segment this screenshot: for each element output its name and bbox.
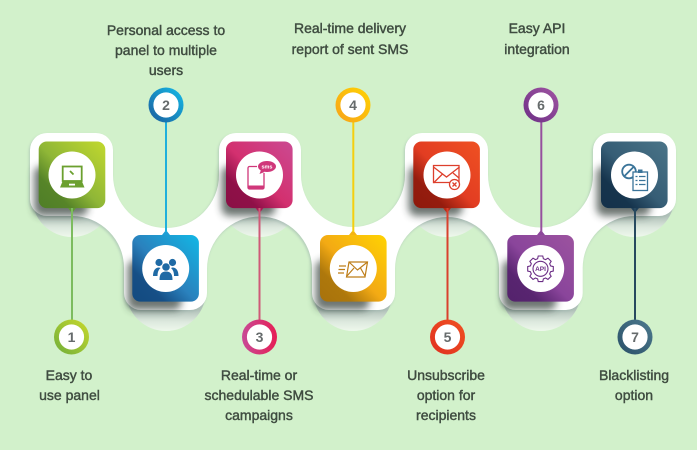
label 4: Real-time delivery (294, 20, 406, 36)
number badge 5 (430, 320, 465, 354)
step 4 (292, 20, 408, 310)
label 2: users (149, 62, 183, 78)
label 6: Easy API (509, 20, 565, 36)
number badge 1 (54, 320, 89, 354)
label 1: use panel (39, 387, 100, 403)
icon: phone with SMS bubble (248, 161, 276, 189)
number badge 7 (618, 320, 652, 354)
icon: fast envelope (338, 262, 368, 277)
number badge 2: 2 (162, 97, 170, 113)
number badge 3 (242, 320, 277, 354)
shadow bowls under tiles (32, 157, 674, 331)
label 1: Easy to (46, 367, 93, 383)
number badge 7: 7 (631, 329, 639, 345)
icon: API gear (528, 256, 553, 282)
step 3 (205, 142, 313, 423)
icon: laptop (60, 166, 84, 188)
number badge 3: 3 (256, 329, 264, 345)
label 2: panel to multiple (115, 42, 217, 58)
icon: blacklist clipboard (622, 165, 648, 190)
label 3: schedulable SMS (205, 387, 313, 403)
step 7 (596, 142, 669, 403)
step 5 (407, 142, 485, 423)
number badge 2 (148, 88, 184, 122)
number badge 4 (336, 88, 370, 122)
step 2 (107, 22, 225, 310)
icon: users (153, 259, 178, 280)
label 5: recipients (416, 407, 476, 423)
icon: phone with SMS bubble: sms (261, 164, 273, 170)
label 7: option (615, 387, 653, 403)
label 7: Blacklisting (599, 367, 669, 383)
number badge 6 (524, 88, 558, 122)
step 1 (34, 142, 105, 403)
label 4: report of sent SMS (292, 41, 408, 57)
label 5: Unsubscribe (407, 367, 485, 383)
number badge 6: 6 (537, 97, 545, 113)
step 6 (502, 20, 574, 310)
number badge 5: 5 (444, 329, 452, 345)
label 3: Real-time or (221, 367, 297, 383)
label 3: campaigns (225, 407, 293, 423)
white wavy band (30, 133, 676, 310)
number badge 1: 1 (68, 329, 76, 345)
label 5: option for (417, 387, 476, 403)
icon: API gear: API (535, 266, 546, 273)
icon: envelope with cross (434, 166, 460, 190)
band edge shadow (29, 134, 675, 312)
label 2: Personal access to (107, 22, 225, 38)
number badge 4: 4 (349, 97, 357, 113)
label 6: integration (504, 41, 570, 57)
